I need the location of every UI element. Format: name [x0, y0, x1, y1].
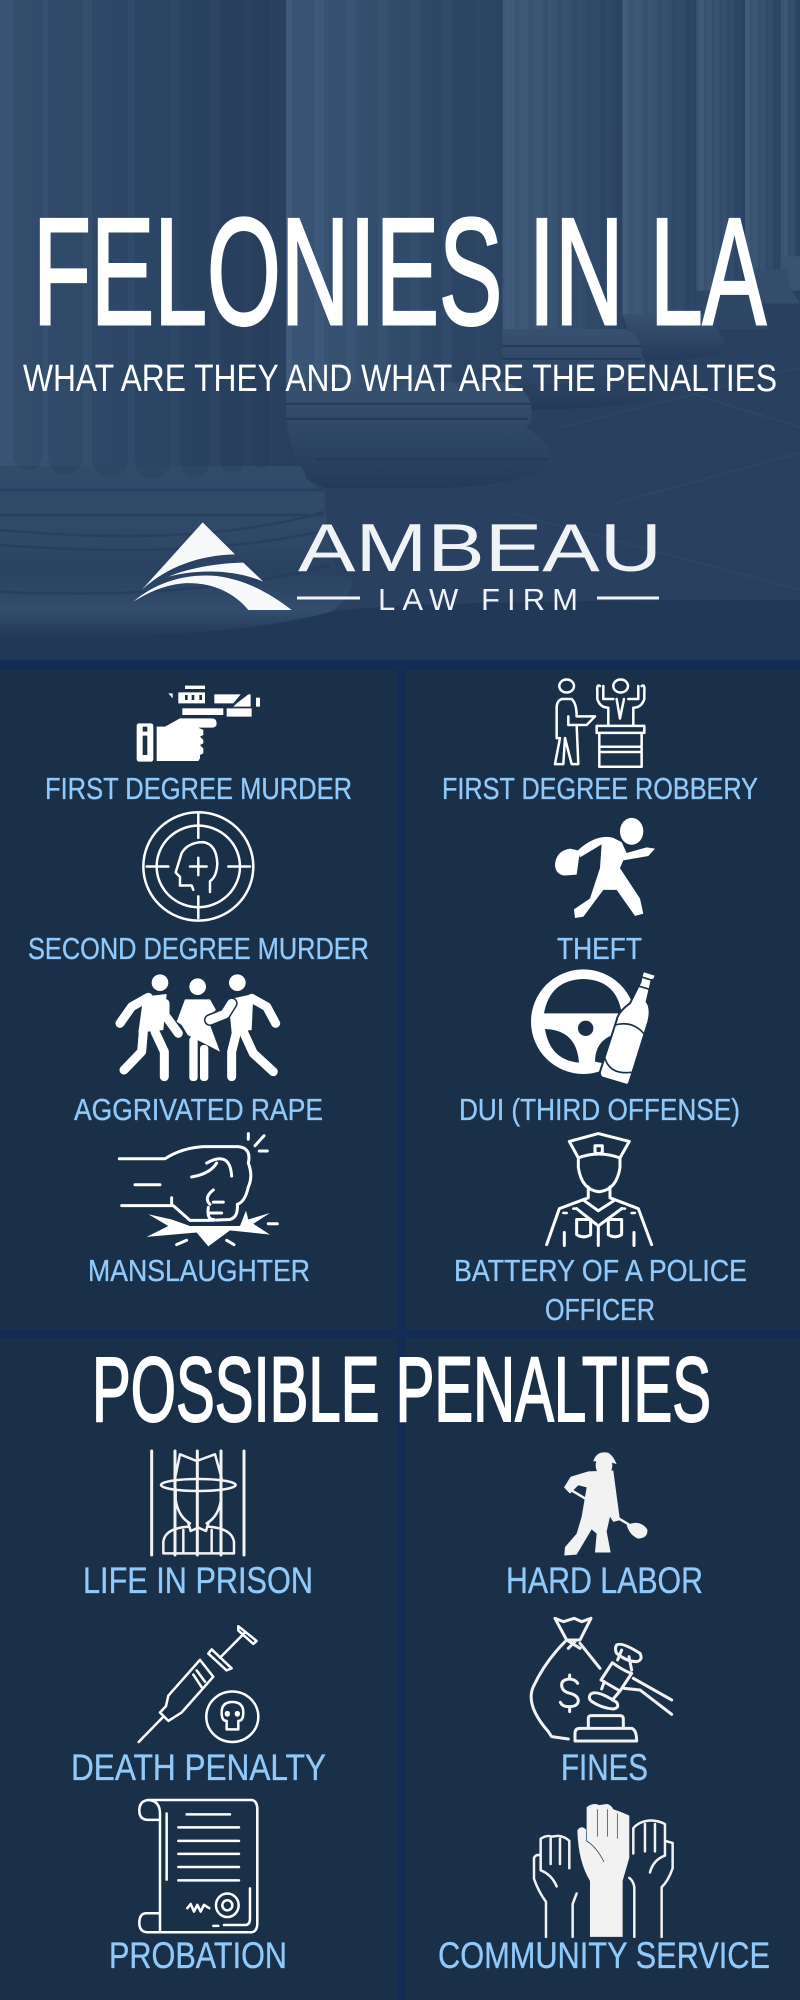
label: hard labor: HARD LABOR: [506, 1560, 703, 1601]
label: battery of a police officer: BATTERY OF A POLICE: [454, 1253, 747, 1288]
logo mark: [133, 522, 292, 610]
logo tagline: LAW FIRM: [378, 582, 578, 617]
icon: hand gun: [137, 686, 260, 762]
icon: robbery at counter: [555, 680, 644, 767]
icon: assault figures: [120, 974, 276, 1081]
icon: raised hands: [534, 1804, 673, 1937]
label: aggrivated rape: AGGRIVATED RAPE: [74, 1092, 323, 1127]
label: fines: FINES: [561, 1747, 648, 1788]
label: death penalty: DEATH PENALTY: [71, 1747, 326, 1788]
logo dashes: [297, 596, 659, 600]
icon: money bag and gavel: [531, 1618, 672, 1741]
icon: fist pounding ground: [119, 1134, 277, 1246]
logo: [133, 510, 662, 617]
icon: running thief with bag: [555, 818, 655, 918]
icon: steering wheel and bottle: [531, 969, 656, 1085]
label: battery line two: OFFICER: [545, 1292, 655, 1327]
label: theft: THEFT: [557, 931, 642, 966]
panel: penalties left: [0, 1338, 397, 2000]
logo wordmark: AMBEAU: [298, 510, 662, 586]
label: second degree murder: SECOND DEGREE MURDER: [28, 931, 369, 966]
panel: felonies right: [406, 670, 800, 1330]
hero banner: [0, 0, 800, 660]
icon: syringe and skull: [139, 1626, 258, 1742]
icon: target on head: [143, 812, 253, 921]
panel: penalties right: [406, 1338, 800, 2000]
label: dui: DUI (THIRD OFFENSE): [459, 1092, 740, 1127]
label: probation: PROBATION: [109, 1935, 287, 1976]
panel: felonies left: [0, 670, 397, 1330]
label: first degree murder: FIRST DEGREE MURDER: [45, 771, 352, 806]
background photo: columns: [0, 0, 800, 660]
label: manslaughter: MANSLAUGHTER: [88, 1253, 310, 1288]
icon: probation scroll: [139, 1800, 257, 1932]
icon: prisoner behind bars: [152, 1451, 244, 1555]
icon: hard labor worker: [564, 1452, 647, 1556]
icon: police officer: [547, 1134, 652, 1245]
label: life in prison: LIFE IN PRISON: [83, 1560, 313, 1601]
